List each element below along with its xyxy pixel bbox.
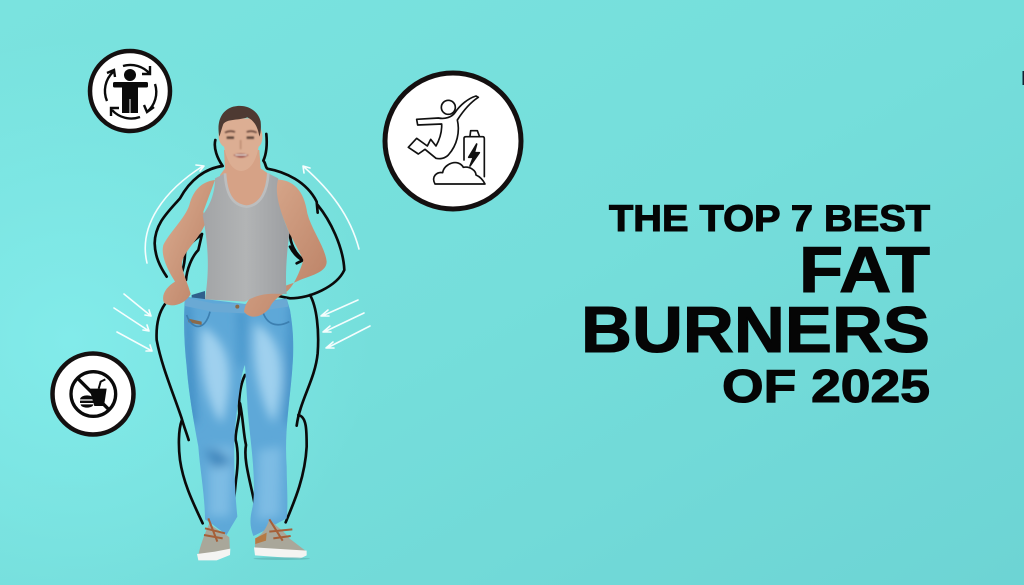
arm: left <box>163 180 215 305</box>
arrows: left hip <box>124 294 151 316</box>
icon: body metabolism <box>90 51 170 131</box>
arm: right <box>244 179 327 317</box>
arrow: upper right sweep <box>303 166 359 249</box>
title line 1: THE TOP 7 BEST <box>609 198 930 239</box>
waistband behind <box>192 291 205 300</box>
jumping figure <box>441 100 455 114</box>
title line 4: OF 2025 <box>722 360 930 412</box>
face features <box>225 131 257 158</box>
arrow: upper left sweep <box>145 165 204 263</box>
title line 3: BURNERS <box>581 294 930 366</box>
figure: upper body <box>163 106 327 317</box>
title <box>581 198 930 412</box>
head <box>219 118 262 171</box>
belt and pockets <box>185 297 288 313</box>
body outline: upper <box>155 134 344 298</box>
shoe: left <box>198 523 230 560</box>
jeans highlights <box>183 303 297 520</box>
rotating arrows <box>105 65 156 119</box>
person glyph <box>113 69 148 113</box>
arrows: right hip <box>321 300 358 316</box>
neckline <box>225 173 268 207</box>
jeans <box>184 297 294 536</box>
icon: no junk food <box>52 354 134 434</box>
neck and chest <box>220 150 272 213</box>
cloud <box>434 163 485 184</box>
cup <box>89 389 107 406</box>
lightning bolt <box>469 144 479 166</box>
title line 2: FAT <box>799 234 930 306</box>
icon: energy jump <box>385 73 521 209</box>
person with weight-loss outline <box>114 106 370 560</box>
white motion arrows <box>114 165 370 351</box>
burger <box>80 395 94 408</box>
shoe: right <box>255 519 307 552</box>
battery <box>464 131 484 177</box>
tank top <box>203 173 289 302</box>
body outline: lower <box>157 295 318 523</box>
figure: jeans and shoes <box>180 290 310 560</box>
